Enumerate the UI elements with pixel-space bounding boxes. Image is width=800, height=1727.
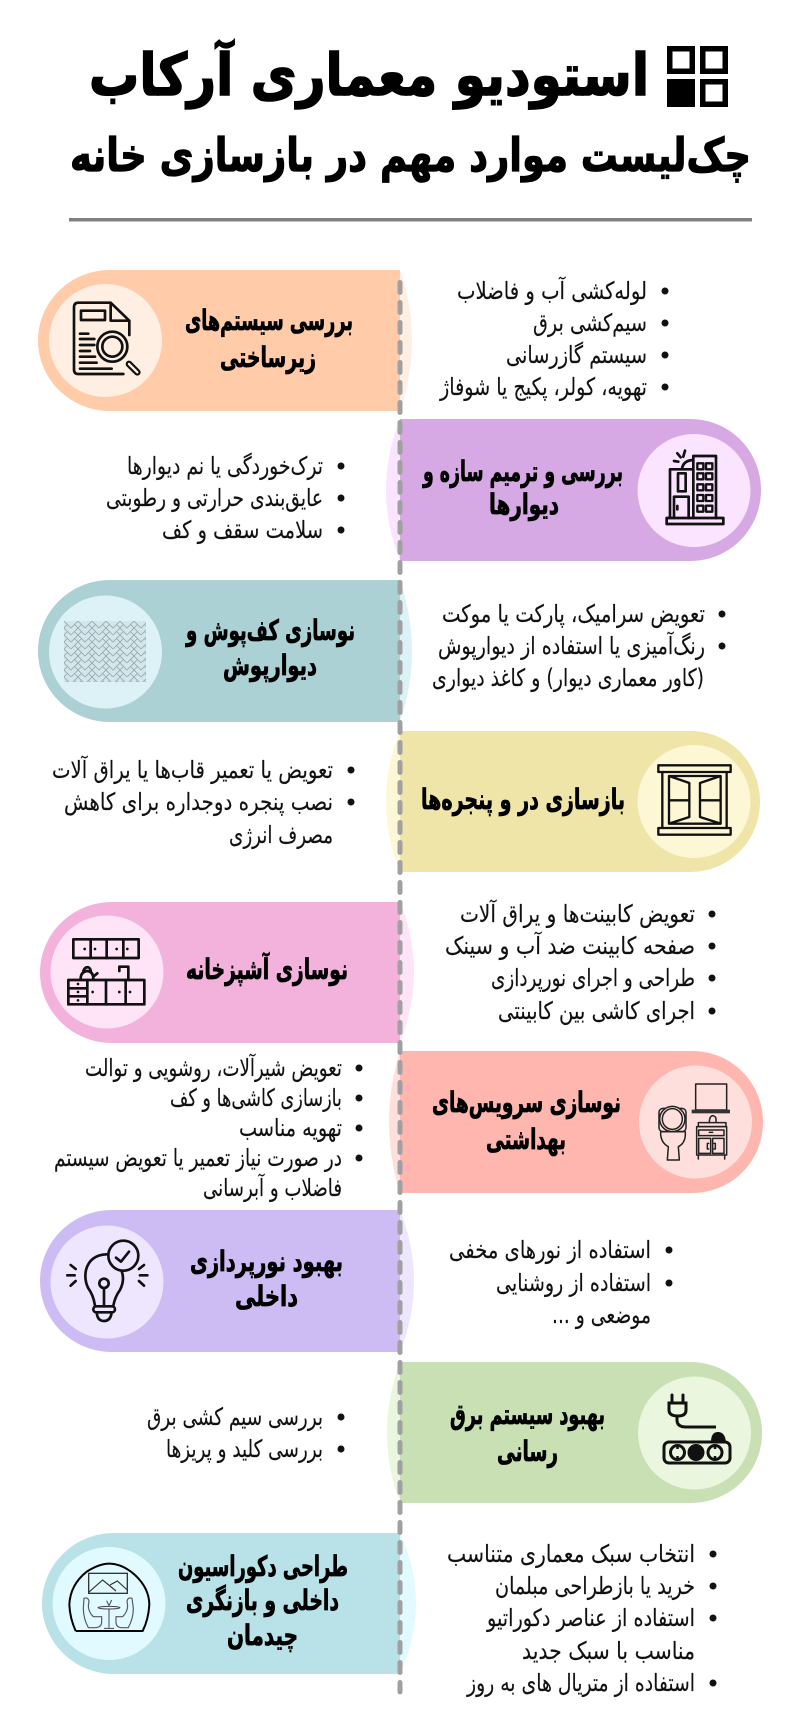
list: bathrooms [54,1053,362,1202]
list: interior lighting: استفاده از نورهای مخفی [449,1236,651,1264]
list: bathrooms: تعویض شیرآلات، روشویی و توالت [85,1053,342,1082]
title: استودیو معماری آرکاب [89,39,649,110]
list: interior decoration: مناسب با سبک جدید [522,1637,695,1665]
heading: چیدمان [227,1619,298,1652]
logo icon [667,49,725,107]
heading: نوسازی آشپزخانه [186,952,348,986]
list: infrastructure systems: لوله‌کشی آب و فاضلاب [457,276,647,305]
icon: light bulb with check [67,1241,147,1321]
list: structure and walls: سلامت سقف و کف [162,516,323,544]
heading: بهبود نورپردازی [190,1245,343,1278]
heading: بهبود سیستم برق [450,1398,605,1431]
heading: زیرساختی [220,341,316,374]
list: interior decoration: استفاده از عناصر دکوراتیو [486,1604,695,1632]
heading: دیوارپوش [223,649,317,682]
heading [185,614,355,682]
heading: بهداشتی [486,1123,566,1156]
panel: floor and wall covering [38,580,412,722]
list: bathrooms: در صورت نیاز تعمیر یا تعویض سیستم [54,1144,342,1172]
heading: بررسی و ترمیم سازه و [422,455,623,488]
list: electrical system [147,1403,344,1463]
icon: toilet and vanity [659,1084,730,1160]
list: bathrooms: فاضلاب و آبرسانی [203,1173,342,1202]
list: kitchen: اجرای کاشی بین کابینتی [498,997,695,1025]
heading: نوسازی سرویس‌های [432,1086,621,1119]
icon: herringbone floor [64,621,146,682]
list: infrastructure systems: تهویه، کولر، پکیج یا شوفاژ [439,373,647,401]
heading: نوسازی کف‌پوش و [185,614,355,647]
icon: decorated room [69,1564,149,1631]
list: structure and walls: ترک‌خوردگی یا نم دیوارها [127,452,323,480]
list: structure and walls: عایق‌بندی حرارتی و رطوبتی [106,484,323,512]
list: interior decoration: خرید یا بازطراحی مبلمان [495,1572,695,1600]
panel: kitchen [40,902,414,1043]
header divider [69,218,752,222]
panel: doors and windows [386,731,760,872]
heading: داخلی و بازنگری [186,1584,339,1617]
list: kitchen [445,899,716,1025]
list: interior decoration: استفاده از متریال های به روز [466,1669,695,1697]
list: infrastructure systems: سیم‌کشی برق [533,309,647,337]
panel: infrastructure systems [38,270,412,411]
panel: interior decoration [42,1533,416,1674]
list: kitchen: طراحی و اجرای نورپردازی [491,964,695,992]
heading [450,1398,605,1468]
list: structure and walls [106,452,344,544]
panel: bathrooms [389,1051,763,1193]
icon: building [667,451,723,524]
heading: دیوارها [489,488,559,521]
panel: interior lighting [40,1210,414,1352]
list: interior decoration: انتخاب سبک معماری متناسب [447,1540,695,1568]
list: doors and windows [52,755,354,849]
panel: electrical system [387,1362,762,1503]
heading [185,304,353,374]
icon: window [658,765,731,835]
icon: power strip and plug [664,1395,730,1463]
heading: بررسی سیستم‌های [185,304,353,337]
heading: داخلی [235,1280,298,1313]
list: bathrooms: تهویه مناسب [239,1114,342,1142]
list: doors and windows: تعویض یا تعمیر قاب‌ها یا یراق آلات [52,755,333,784]
heading [432,1086,621,1156]
heading [190,1245,343,1313]
list: kitchen: صفحه کابینت ضد آب و سینک [445,931,695,960]
heading: طراحی دکوراسیون [178,1550,348,1583]
center dashed timeline [398,282,402,1692]
list: interior lighting: موضعی و ... [552,1301,651,1329]
heading [178,1550,348,1652]
icon: kitchen cabinets [68,939,144,1004]
list: electrical system: بررسی سیم کشی برق [147,1403,323,1431]
list: electrical system: بررسی کلید و پریزها [166,1435,323,1463]
list: doors and windows: مصرف انرژی [229,821,333,849]
heading: بازسازی در و پنجره‌ها [421,783,625,816]
list: kitchen: تعویض کابینت‌ها و یراق آلات [460,899,695,928]
heading: رسانی [497,1435,558,1468]
list: floor and wall covering: رنگ‌آمیزی یا استفاده از دیوارپوش [438,631,705,660]
heading [422,455,623,521]
panel: structure and walls [386,419,761,561]
list: doors and windows: نصب پنجره دوجداره برای کاهش [64,788,333,816]
icon: document with magnifier [74,303,137,374]
list: floor and wall covering [432,600,726,692]
list: interior lighting: استفاده از روشنایی [496,1269,651,1297]
list: interior lighting [449,1236,672,1329]
list: infrastructure systems [439,276,668,401]
list: infrastructure systems: سیستم گازرسانی [506,341,647,369]
list: bathrooms: بازسازی کاشی‌ها و کف [170,1084,342,1112]
list: floor and wall covering: تعویض سرامیک، پارکت یا موکت [442,600,705,628]
list: interior decoration [447,1540,716,1697]
list: floor and wall covering: (کاور معماری دیوار) و کاغذ دیواری [432,664,704,692]
